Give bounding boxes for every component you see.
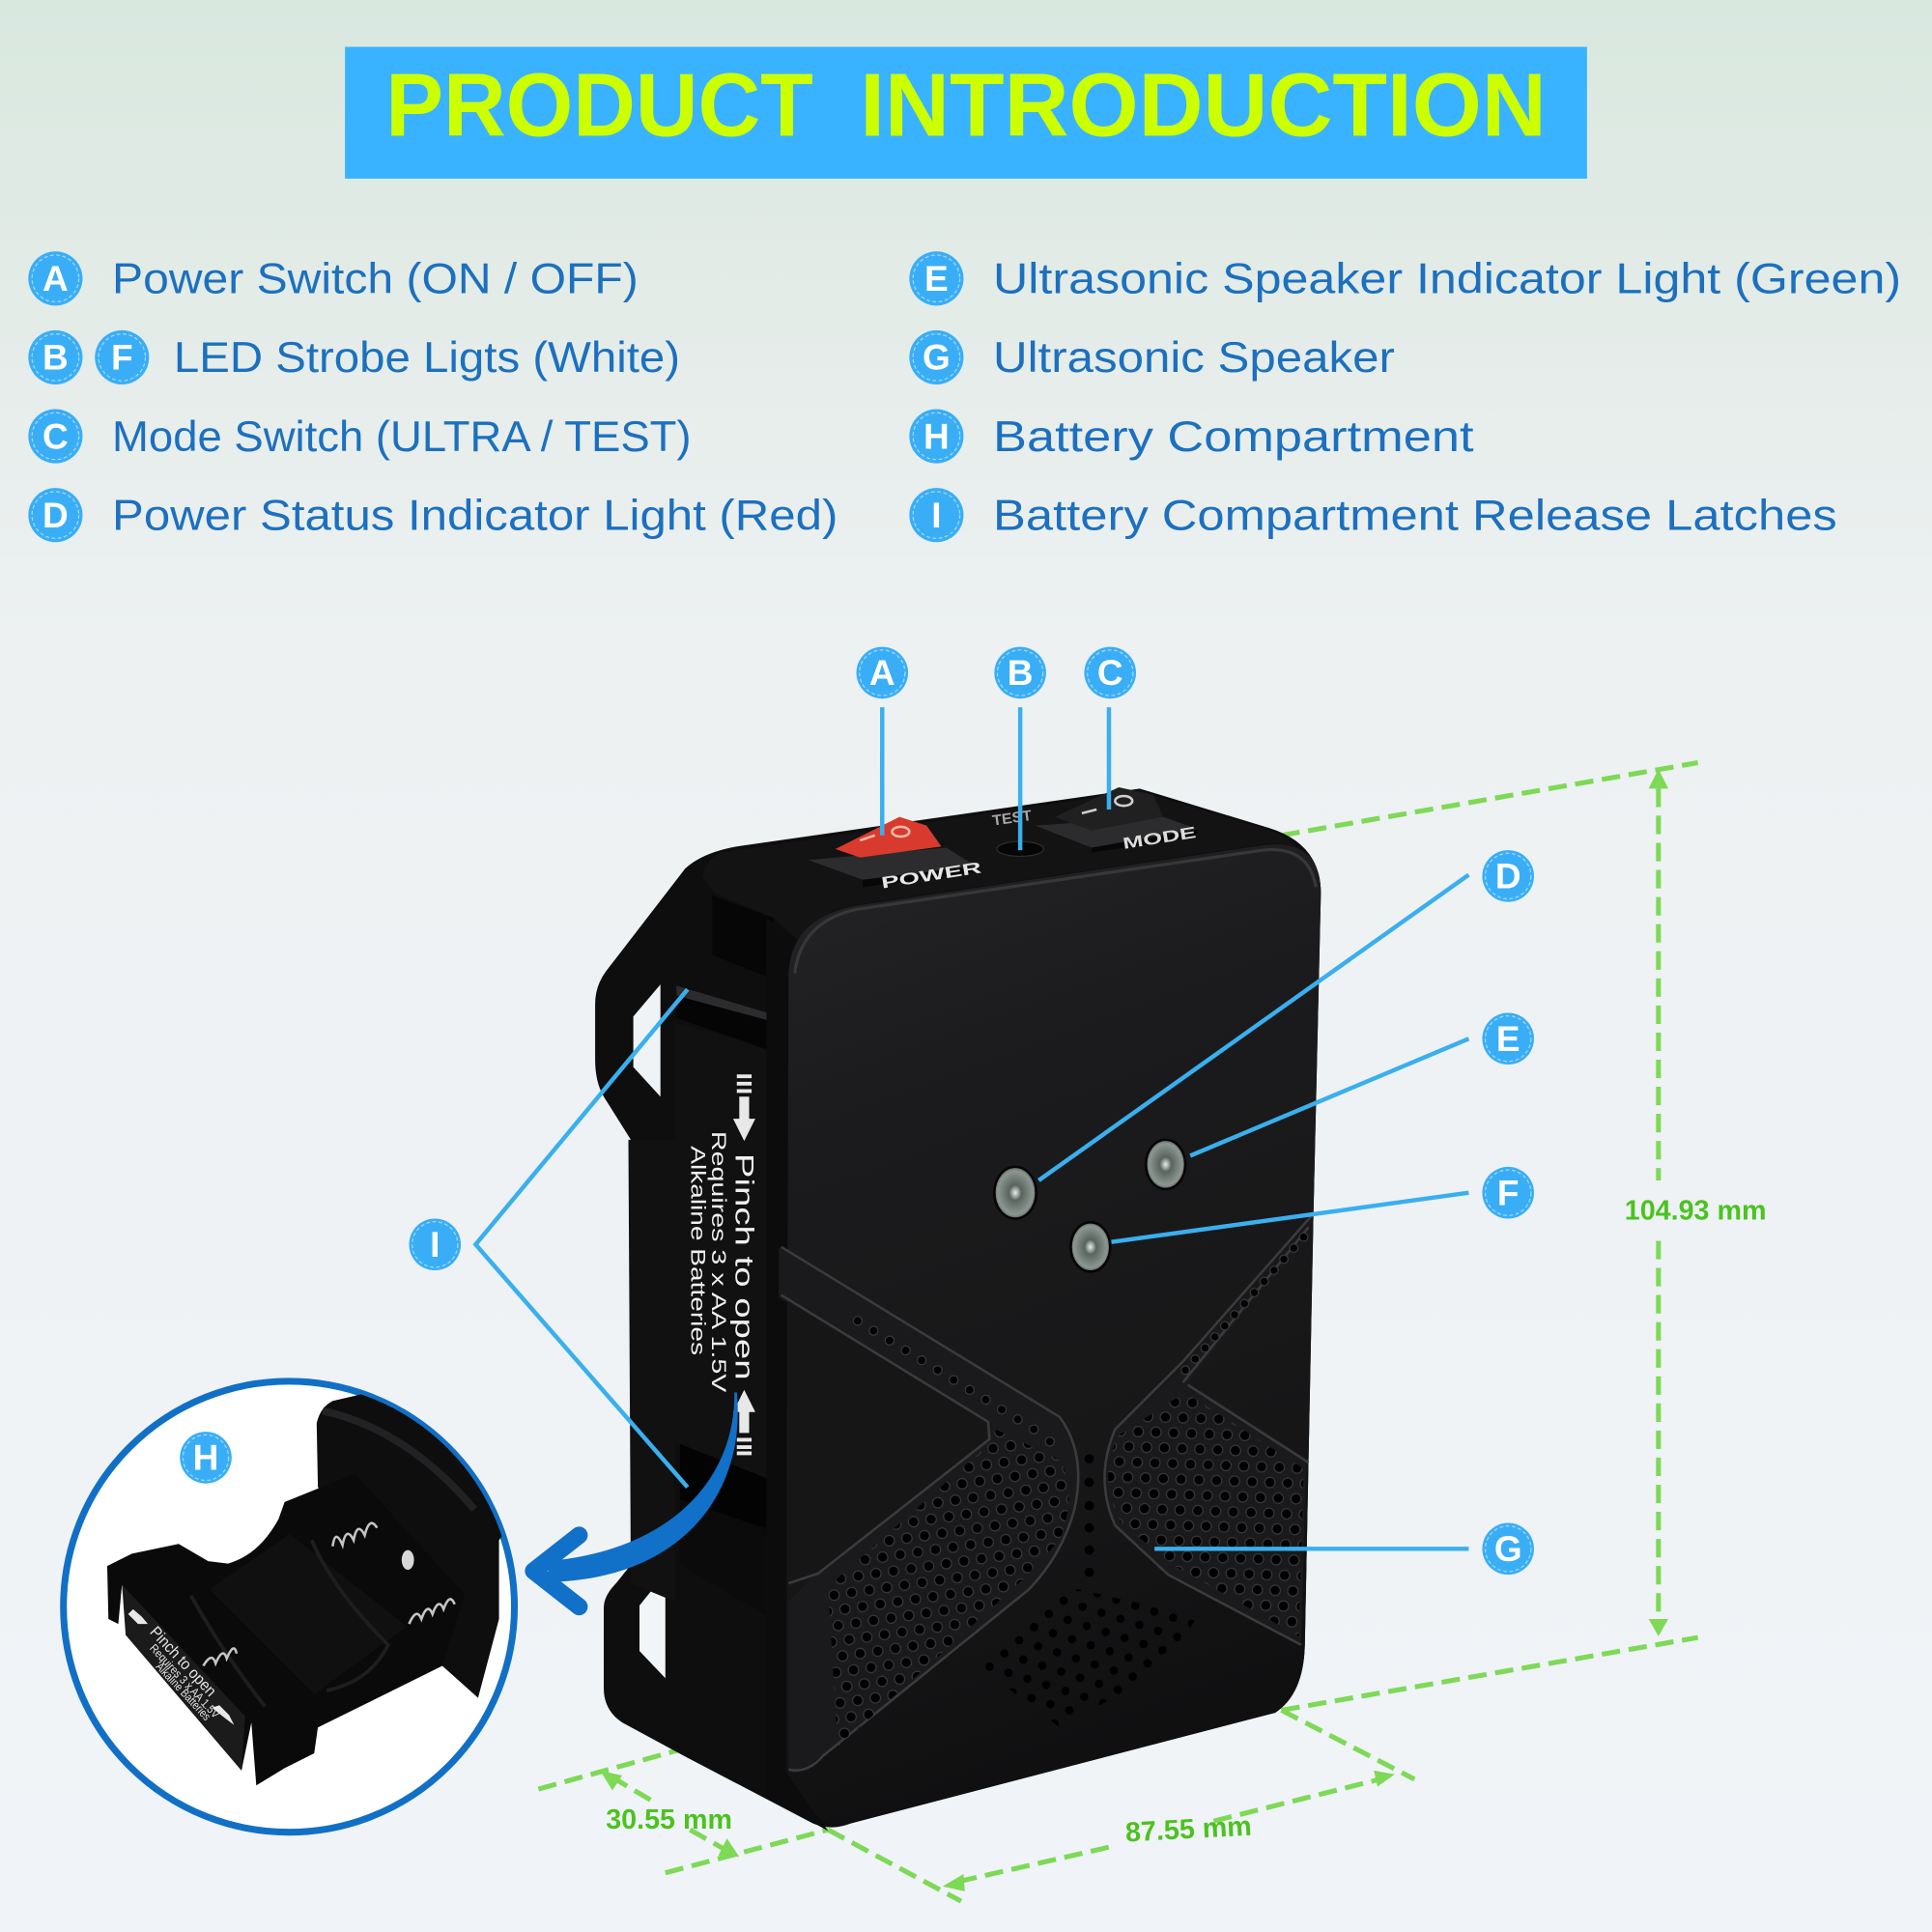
upper handle cutout bbox=[634, 984, 661, 1096]
spring right bbox=[409, 1599, 455, 1624]
test light hole bbox=[997, 841, 1043, 856]
front face top rim highlight bbox=[795, 850, 1316, 974]
legend item A: A bbox=[43, 259, 69, 298]
shell highlight bbox=[323, 1410, 474, 1509]
side label panel bbox=[675, 1023, 766, 1479]
tray ribs bbox=[191, 1540, 388, 1707]
badge A bbox=[856, 647, 908, 698]
legend item I: I bbox=[931, 496, 942, 535]
badge F: F bbox=[1497, 1173, 1520, 1212]
lower handle cutout bbox=[639, 1574, 666, 1678]
legend item I: Battery Compartment Release Latches bbox=[993, 492, 1837, 539]
legend item H: Battery Compartment bbox=[993, 413, 1474, 461]
legend item B and F: LED Strobe Ligts (White) bbox=[174, 334, 680, 382]
metal contact bbox=[402, 1550, 414, 1570]
label text on side panel: Pinch to open bbox=[729, 1153, 758, 1380]
badge A: A bbox=[869, 653, 895, 693]
LED F bbox=[1070, 1222, 1110, 1271]
front face bbox=[786, 844, 1321, 1826]
device shell in inset bbox=[317, 1395, 502, 1698]
label text on side panel: Requires 3 x AA 1.5V bbox=[707, 1131, 731, 1393]
legend: left column bbox=[28, 251, 838, 542]
LED E bbox=[1146, 1140, 1185, 1189]
tray label text: Requires 3 x AA 1.5V bbox=[147, 1641, 223, 1721]
bottom speaker grille bbox=[979, 1589, 1198, 1727]
legend item I bbox=[909, 488, 1837, 542]
callout lines bbox=[475, 707, 1468, 1548]
label arrow up bbox=[733, 1390, 755, 1455]
tray floor bbox=[210, 1534, 407, 1694]
device: ultrasonic repeller bbox=[595, 787, 1321, 1831]
badge B: B bbox=[1008, 653, 1033, 693]
top surface bbox=[702, 791, 1319, 943]
label text on side panel: Alkaline Batteries bbox=[687, 1146, 711, 1355]
mode switch bbox=[991, 787, 1198, 853]
legend item B and F: F bbox=[111, 338, 133, 378]
dimension guides: width and height extension lines bbox=[538, 763, 1698, 1901]
legend item H: H bbox=[923, 416, 950, 456]
right speaker band bbox=[1104, 1213, 1314, 1645]
legend item A: Power Switch (ON / OFF) bbox=[112, 256, 639, 303]
legend item G: Ultrasonic Speaker bbox=[993, 334, 1395, 382]
legend item E: E bbox=[924, 259, 949, 298]
legend item H bbox=[909, 409, 1474, 464]
left speaker band bbox=[779, 1247, 1078, 1773]
badge I bbox=[409, 1218, 461, 1270]
legend item B and F: B bbox=[43, 338, 69, 378]
tray label text: Pinch to open bbox=[146, 1623, 220, 1700]
legend: right column bbox=[909, 251, 1901, 542]
upper latch slot bbox=[676, 985, 768, 1050]
tray label text: Alkaline Batteries bbox=[154, 1660, 213, 1723]
depth dimension bbox=[600, 1771, 739, 1857]
legend item G: G bbox=[923, 338, 951, 378]
side wall shade bbox=[766, 918, 828, 1831]
ridge hole row right bbox=[1181, 1233, 1308, 1375]
height dimension: 104.93 mm bbox=[1625, 1196, 1766, 1227]
title banner: INTRODUCTION bbox=[860, 54, 1547, 155]
power switch: POWER bbox=[880, 858, 982, 893]
speaker ridge highlights bbox=[781, 1213, 1314, 1771]
title banner bbox=[345, 46, 1587, 179]
left triangle recess bbox=[788, 1302, 989, 1577]
badge B bbox=[994, 647, 1046, 698]
badge G: G bbox=[1494, 1529, 1522, 1569]
legend item D: Power Status Indicator Light (Red) bbox=[112, 492, 838, 539]
tray label face bbox=[122, 1584, 245, 1771]
badge H bbox=[180, 1432, 232, 1484]
legend item E: Ultrasonic Speaker Indicator Light (Green) bbox=[993, 256, 1901, 303]
badge D bbox=[1482, 850, 1534, 902]
title banner: PRODUCT bbox=[385, 54, 813, 155]
badge I: I bbox=[430, 1225, 440, 1264]
label text on side panel bbox=[687, 1131, 758, 1393]
badge C: C bbox=[1097, 653, 1123, 693]
battery tray bbox=[106, 1488, 442, 1785]
centre grille column bbox=[1085, 1454, 1094, 1577]
left speaker grille bbox=[828, 1430, 1069, 1747]
right speaker grille bbox=[1108, 1392, 1303, 1636]
spring upper bbox=[332, 1523, 377, 1547]
width dimension: 87.55 mm bbox=[1124, 1811, 1253, 1848]
legend item B and F bbox=[28, 330, 680, 384]
upper latch ledge bbox=[676, 985, 768, 1020]
LED D bbox=[994, 1167, 1037, 1218]
badge E bbox=[1482, 1012, 1534, 1065]
width dimension bbox=[943, 1771, 1395, 1891]
ridge hole row left bbox=[853, 1317, 1054, 1446]
legend item D: D bbox=[43, 496, 69, 535]
lower latch slot bbox=[680, 1444, 768, 1529]
diagram badges bbox=[409, 647, 1534, 1575]
side recess upper bbox=[712, 895, 774, 980]
label arrow down bbox=[733, 1074, 755, 1141]
detail inset: battery compartment bbox=[64, 1381, 542, 1833]
badge H: H bbox=[193, 1438, 218, 1478]
badge F bbox=[1482, 1167, 1534, 1218]
tray label arrows bbox=[128, 1609, 234, 1725]
side wall bbox=[629, 1140, 675, 1602]
legend item A bbox=[28, 251, 639, 305]
badge D: D bbox=[1495, 857, 1521, 896]
mode switch: TEST bbox=[991, 808, 1034, 830]
spring lower bbox=[203, 1648, 237, 1665]
legend item G bbox=[909, 330, 1395, 384]
height dimension bbox=[1625, 769, 1766, 1636]
power switch bbox=[809, 817, 982, 893]
inset contents bbox=[107, 1392, 542, 1785]
legend item C: Mode Switch (ULTRA / TEST) bbox=[112, 413, 692, 461]
lower recess bbox=[680, 1499, 768, 1616]
mode switch: MODE bbox=[1122, 823, 1197, 853]
blue arrow from compartment to inset bbox=[533, 1392, 738, 1606]
inset circle bbox=[64, 1381, 515, 1833]
legend item C: C bbox=[43, 416, 69, 456]
badge G bbox=[1482, 1523, 1534, 1575]
depth dimension: 30.55 mm bbox=[606, 1804, 732, 1835]
badge E: E bbox=[1496, 1019, 1520, 1059]
badge C bbox=[1084, 647, 1136, 698]
device silhouette with handles bbox=[595, 788, 1321, 1828]
